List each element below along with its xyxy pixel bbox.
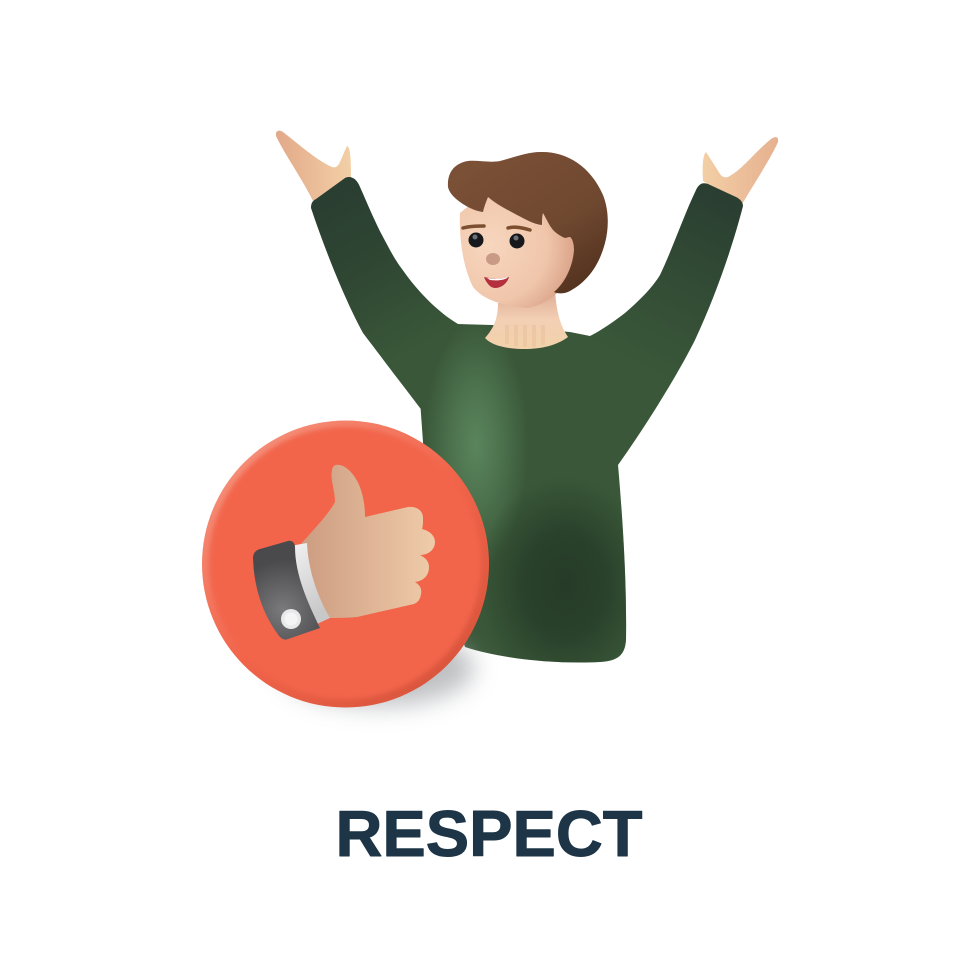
badge <box>202 420 489 708</box>
icon: right hand <box>703 137 778 206</box>
person <box>276 131 778 695</box>
right sleeve <box>570 183 743 465</box>
eyebrows <box>463 226 530 230</box>
neck and collar <box>485 290 568 349</box>
left sleeve <box>311 177 470 430</box>
title: RESPECT <box>335 797 643 870</box>
cuff button <box>281 609 301 629</box>
badge shadow <box>282 630 474 706</box>
badge disc <box>202 420 489 708</box>
nose <box>486 253 500 265</box>
illustration and title canvas <box>202 130 778 857</box>
hand <box>300 465 435 618</box>
face <box>460 190 575 308</box>
icon: left hand <box>276 131 351 201</box>
mouth <box>484 277 509 288</box>
jacket cuff <box>253 541 320 640</box>
shirt cuff <box>290 543 330 624</box>
hair <box>448 152 608 293</box>
eyes <box>468 232 524 248</box>
icon: thumbs up <box>253 465 435 640</box>
sweater body <box>420 324 626 662</box>
